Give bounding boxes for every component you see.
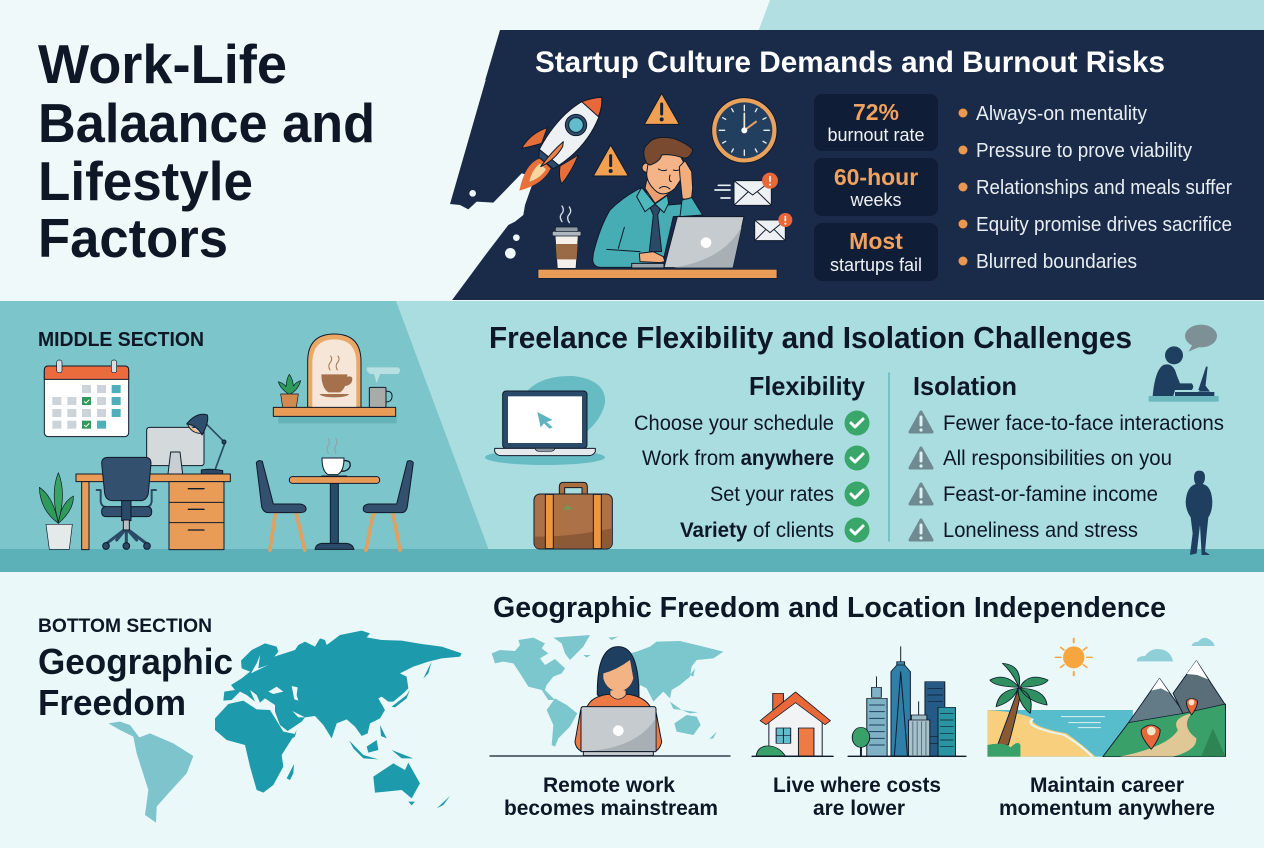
caption: lower costs: Live where costs: [773, 774, 941, 797]
heading: isolation: Isolation: [913, 371, 1017, 401]
caption: career momentum: momentum anywhere: [999, 797, 1215, 820]
title: Balaance and: [38, 92, 375, 154]
column: isolation: Fewer face-to-face interactions: [943, 411, 1224, 435]
icon: city skyline: [848, 647, 966, 756]
icon: person at desk with speech bubble: [1149, 325, 1219, 402]
icon: rocket: [519, 97, 602, 191]
chart: world map: [108, 631, 462, 823]
stat: 60-hour weeks: [814, 158, 938, 216]
stat: 72% burnout rate: burnout rate: [827, 125, 925, 145]
icon: suitcase: [534, 482, 612, 549]
icon: laptop: [632, 217, 744, 268]
caption: remote work: Remote work: [543, 774, 675, 797]
icon: email alert one: [715, 173, 778, 205]
icon: calendar: [44, 360, 129, 437]
heading: startup culture: Startup Culture Demands and Burnout Risks: [535, 46, 1165, 79]
illustration: beach and mountains: [987, 638, 1225, 757]
chart: Americas: [108, 722, 193, 823]
column: flexibility: Set your rates: [710, 482, 834, 506]
heading: geographic freedom: Geographic Freedom and Location Independence: [493, 592, 1166, 624]
list: burnout risks: Equity promise drives sacrifice: [976, 214, 1232, 236]
icon: rocket smoke: [430, 80, 535, 301]
stat: most startups fail: startups fail: [830, 255, 922, 275]
panel: middle section background: [0, 301, 1264, 572]
icon: laptop with cursor: [485, 376, 605, 465]
icon: house: [752, 692, 833, 756]
caption: lower costs: [773, 774, 941, 820]
section: geographic freedom label: BOTTOM SECTION: [38, 615, 212, 637]
icon: smoke puffs: [469, 190, 520, 259]
section: geographic freedom label: [38, 615, 233, 723]
icon: clock: [712, 98, 777, 163]
stat: 72% burnout rate: 72%: [853, 99, 899, 125]
icon: wall shelf with coffee sign: [273, 334, 400, 423]
section: geographic freedom label: Freedom: [38, 682, 186, 723]
icon: woman with laptop: [575, 647, 662, 756]
caption: remote work: becomes mainstream: [504, 797, 718, 820]
stat: most startups fail: Most: [849, 228, 903, 254]
stat: 72% burnout rate: [814, 94, 938, 151]
heading: flexibility: Flexibility: [749, 371, 866, 401]
list: burnout risks: Always-on mentality: [976, 103, 1147, 125]
caption: lower costs: are lower: [813, 797, 905, 820]
icon: potted plant: [39, 473, 73, 549]
label: middle section: MIDDLE SECTION: [38, 329, 204, 351]
stat: most startups fail: [814, 223, 938, 281]
column: flexibility: Choose your schedule: [634, 411, 834, 435]
illustration: burned-out founder: [430, 80, 792, 301]
icon: stressed worker: [593, 137, 703, 267]
chart: small world map: [492, 635, 723, 747]
icon: cafe table and chairs: [256, 439, 413, 550]
column: isolation: Feast-or-famine income: [943, 482, 1158, 506]
title: [38, 33, 375, 269]
icon: lone standing figure: [1186, 471, 1212, 555]
section: geographic freedom label: Geographic: [38, 641, 233, 682]
illustration: remote worker with map: [490, 635, 730, 756]
title: Lifestyle: [38, 150, 253, 212]
caption: remote work: [504, 774, 718, 820]
column: flexibility: [634, 371, 870, 542]
icon: warning triangle upper: [644, 93, 679, 124]
icon: warning triangle lower: [593, 145, 628, 176]
stat: 60-hour weeks: weeks: [849, 190, 902, 210]
icon: warning triangles: [910, 412, 932, 540]
icon: check marks: [844, 410, 870, 542]
title: Factors: [38, 207, 228, 269]
caption: career momentum: [999, 774, 1215, 820]
icon: email alert two: [755, 213, 792, 241]
heading: freelance: Freelance Flexibility and Isolation Challenges: [489, 320, 1132, 355]
list: burnout risks: Pressure to prove viability: [976, 140, 1192, 162]
icon: office chair: [97, 457, 156, 549]
column: isolation: [910, 371, 1224, 542]
stat: 60-hour weeks: 60-hour: [834, 164, 918, 190]
caption: career momentum: Maintain career: [1030, 774, 1184, 797]
illustration: home office: [39, 334, 413, 550]
column: flexibility: Work from anywhere: [642, 446, 834, 470]
icon: desk with monitor and lamp: [76, 414, 230, 550]
icon: desk: [538, 269, 777, 278]
column: isolation: All responsibilities on you: [943, 446, 1172, 470]
panel: startup culture: [430, 30, 1264, 301]
column: flexibility: Variety of clients: [680, 518, 834, 542]
list: burnout risks: [958, 103, 1232, 273]
title: Work-Life: [38, 33, 287, 95]
column: isolation: Loneliness and stress: [943, 518, 1138, 542]
icon: coffee cup: [552, 206, 581, 268]
list: burnout risks: Blurred boundaries: [976, 251, 1137, 273]
list: burnout risks: Relationships and meals suffer: [976, 177, 1232, 199]
illustration: house and city: [752, 647, 966, 756]
